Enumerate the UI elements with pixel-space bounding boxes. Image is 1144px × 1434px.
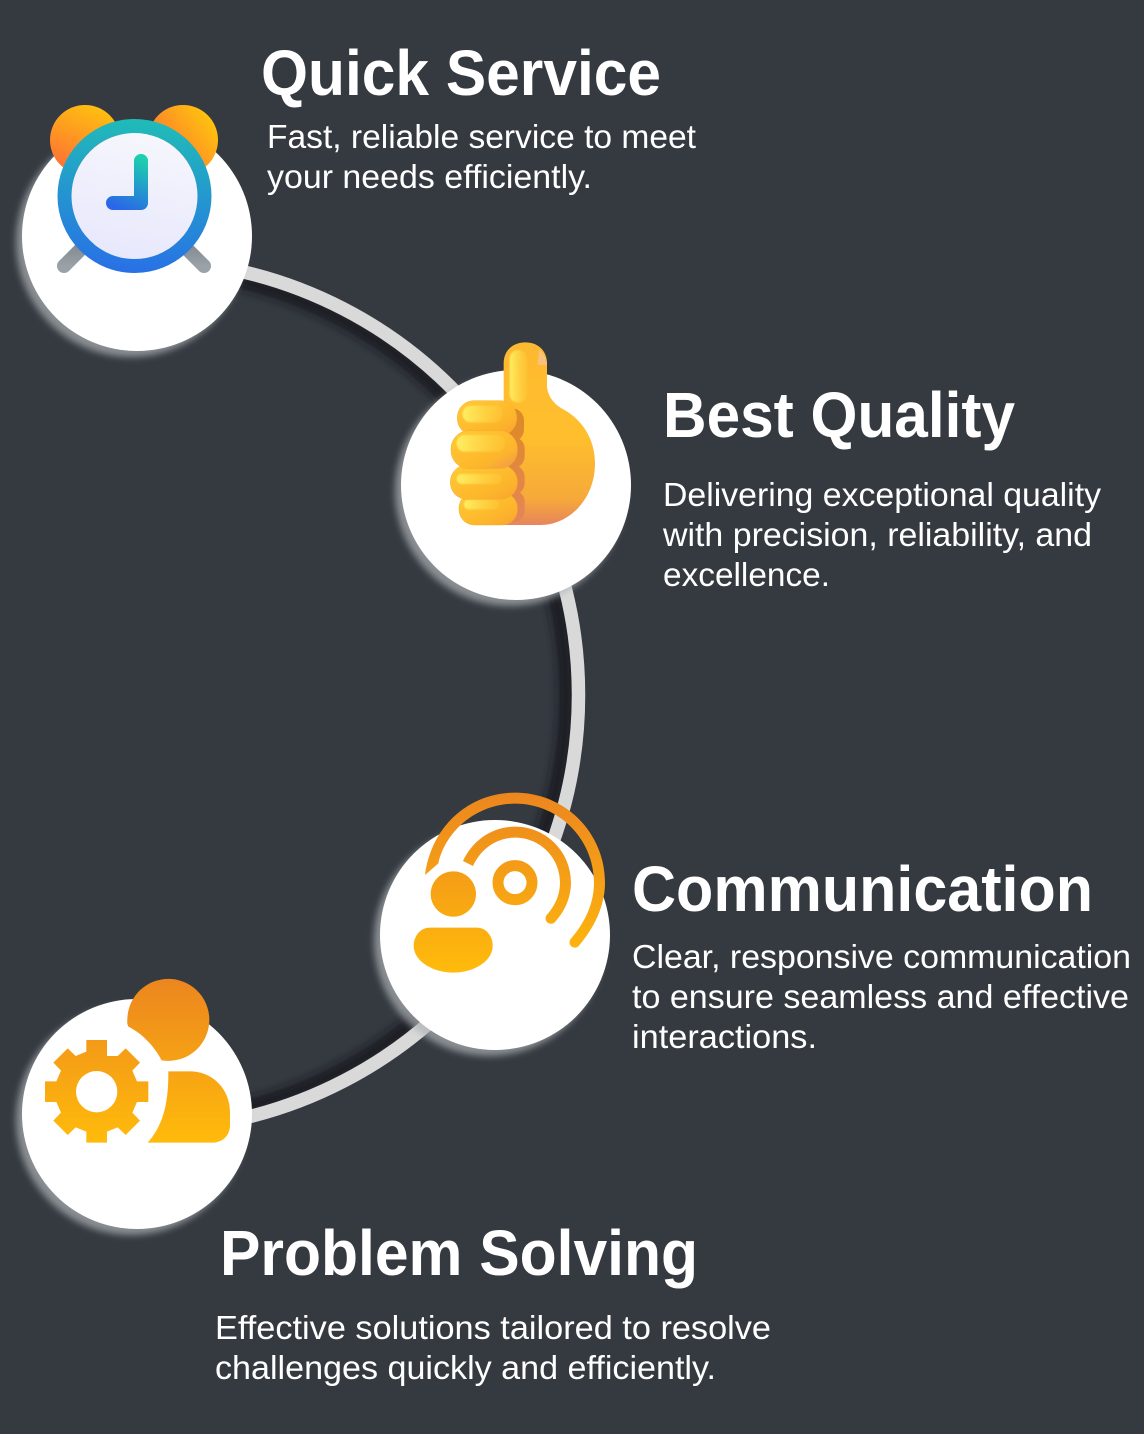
text: quick service description: Fast, reliable service to meet [267,118,696,155]
text: problem solving description: challenges quickly and efficiently. [215,1349,716,1386]
text: best quality description: Delivering exceptional quality [663,476,1102,513]
white circle: quick service [22,121,252,351]
icon: person with gear [45,979,230,1143]
text: problem solving description: Effective solutions tailored to resolve [215,1309,771,1346]
text: problem solving description [215,1309,771,1386]
icon: thumbs up [450,342,595,525]
step: quick service [22,37,696,351]
heading: problem solving: Problem Solving [220,1217,698,1289]
white circle: communication [380,820,610,1050]
icon: person broadcasting [414,793,605,973]
text: quick service description [267,118,696,195]
heading: quick service: Quick Service [261,37,661,109]
icon: alarm clock [50,105,218,266]
text: quick service description: your needs efficiently. [267,158,592,195]
white circle: best quality [401,370,631,600]
heading: best quality: Best Quality [663,379,1015,451]
heading: communication: Communication [632,853,1093,925]
text: communication description: to ensure seamless and effective [632,978,1129,1015]
step: communication [380,793,1131,1055]
text: best quality description: excellence. [663,556,830,593]
text: best quality description: with precision, reliability, and [662,516,1092,553]
text: communication description: interactions. [632,1018,817,1055]
step: problem solving [22,979,771,1386]
connector arc [200,264,579,1126]
text: communication description: Clear, responsive communication [632,938,1131,975]
white circle: problem solving [22,999,252,1229]
text: best quality description [662,476,1102,593]
step: best quality [401,342,1102,600]
text: communication description [632,938,1131,1055]
